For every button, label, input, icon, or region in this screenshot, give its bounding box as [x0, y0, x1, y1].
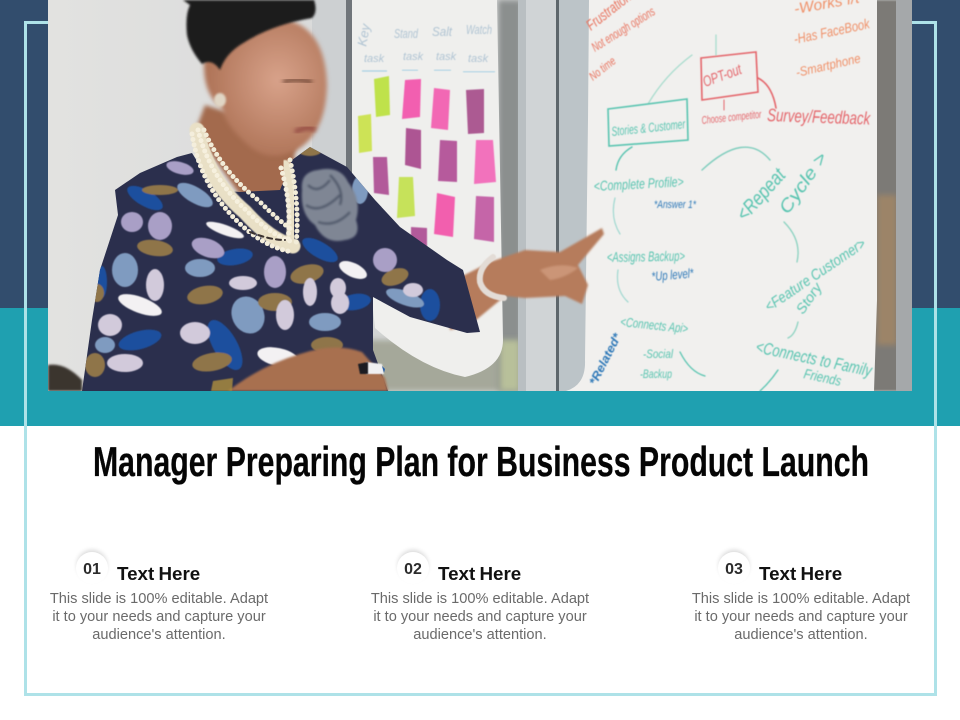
- number badge 01: [76, 552, 108, 584]
- item description 02: This slide is 100% editable. Adapt: [371, 591, 589, 607]
- right flip chart with handwriting: <Repeat: [732, 164, 791, 225]
- patterned dress with cats: [80, 140, 490, 391]
- right flip chart with handwriting: Stories & Customer: [611, 116, 686, 139]
- left paper with sticky notes: task: [436, 51, 457, 63]
- number badge 02: [397, 552, 429, 584]
- left paper with sticky notes: [352, 0, 503, 377]
- item 03: [692, 548, 910, 643]
- item 02: [371, 548, 589, 643]
- right flip chart with handwriting: <Connects to Family: [754, 337, 875, 381]
- number badge 01: 01: [83, 561, 101, 578]
- left paper with sticky notes: Key: [354, 21, 373, 47]
- right flip chart with handwriting: Survey/Feedback: [767, 105, 871, 129]
- item description 02: audience's attention.: [413, 627, 547, 643]
- woman's pointing arm and hand: [445, 228, 604, 330]
- number badge 02: 02: [404, 561, 422, 578]
- right flip chart with handwriting: <Feature Customer>: [762, 235, 869, 315]
- left paper with sticky notes: Stand: [394, 26, 419, 41]
- right flip chart with handwriting: -Social: [643, 347, 673, 361]
- item 01: [50, 548, 268, 643]
- item description 03: audience's attention.: [734, 627, 868, 643]
- right flip chart with handwriting: *Answer 1*: [654, 199, 697, 211]
- item description 02: it to your needs and capture your: [373, 609, 587, 625]
- right flip chart with handwriting: Story: [792, 279, 826, 317]
- left paper with sticky notes: Watch: [466, 22, 492, 37]
- right flip chart with handwriting: *Related*: [586, 330, 625, 387]
- wristwatch: [480, 257, 504, 298]
- right flip chart with handwriting: -Has FaceBook: [792, 15, 872, 47]
- item description 01: it to your needs and capture your: [52, 609, 266, 625]
- right flip chart with handwriting: [566, 0, 877, 391]
- item heading 02: Text Here: [438, 563, 521, 584]
- right flip chart with handwriting: No time: [586, 54, 619, 83]
- item description 02: [371, 591, 589, 643]
- item description 01: audience's attention.: [92, 627, 226, 643]
- left paper with sticky notes: task: [468, 53, 489, 65]
- right flip chart with handwriting: <Complete Profile>: [593, 173, 684, 194]
- number badge 03: [718, 552, 750, 584]
- item description 01: This slide is 100% editable. Adapt: [50, 591, 268, 607]
- item description 03: it to your needs and capture your: [694, 609, 908, 625]
- item description 03: [692, 591, 910, 643]
- bag in the corner: [48, 365, 82, 391]
- item heading 03: Text Here: [759, 563, 842, 584]
- left paper with sticky notes: Salt: [432, 24, 453, 39]
- item description 03: This slide is 100% editable. Adapt: [692, 591, 910, 607]
- right flip chart with handwriting: <Assigns Backup>: [607, 248, 685, 265]
- right flip chart with handwriting: OPT-out: [701, 61, 745, 91]
- background band: navy: [0, 0, 960, 308]
- right flip chart with handwriting: <Connects Api>: [620, 314, 689, 336]
- pearl necklace: [192, 130, 297, 252]
- right flip chart with handwriting: Friends: [802, 365, 843, 389]
- photo: manager pointing at whiteboard plan: [48, 0, 912, 391]
- ruffle: [302, 169, 358, 241]
- woman's head and hair: [183, 0, 327, 195]
- background scene: [48, 0, 912, 391]
- right flip chart with handwriting: -Smartphone: [794, 50, 862, 80]
- number badge 03: 03: [725, 561, 743, 578]
- right flip chart with handwriting: Choose competitor: [701, 109, 763, 127]
- right flip chart with handwriting: *Up level*: [651, 265, 695, 284]
- right flip chart with handwriting: -Backup: [640, 367, 672, 381]
- right flip chart with handwriting: Cycle >: [775, 148, 831, 217]
- item description 01: [50, 591, 268, 643]
- left paper with sticky notes: task: [403, 51, 424, 63]
- item heading 01: Text Here: [117, 563, 200, 584]
- left paper with sticky notes: task: [364, 53, 385, 65]
- background band: teal: [0, 308, 960, 426]
- lower hand holding marker: [211, 347, 388, 391]
